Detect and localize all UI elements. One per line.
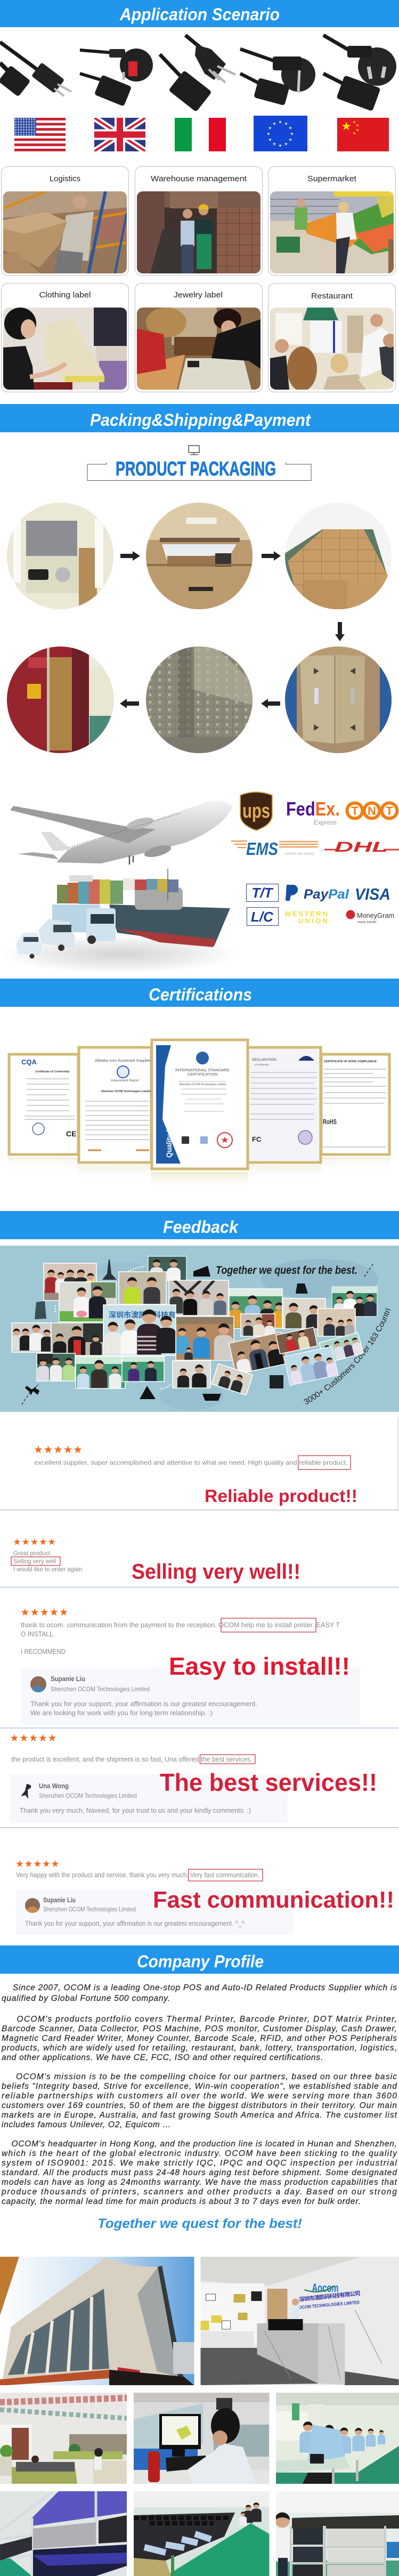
paragraph: intro: Since 2007, OCOM is a leading One-stop POS and Auto-ID Related Products Supplier which is: [13, 1983, 397, 1992]
photo: shipping container loading: [7, 647, 114, 753]
panel: Jewelry label: [135, 284, 262, 392]
photo: open office: [0, 2393, 127, 2484]
section header: Feedback: Feedback: [163, 1217, 239, 1237]
certificate: RoHS compliance: CERTIFICATE OF ROHS COMPLIANCE: [324, 1060, 377, 1063]
shipping carrier logos: [231, 792, 399, 859]
logo: VISA: VISA: [355, 885, 390, 903]
photo: restaurant diners: [270, 308, 397, 391]
paragraph: headquarters and quality: standard. All the products must pass 24-48 hours aging test before shipment. Some designated: [2, 2168, 397, 2177]
logo: EMS: EMS: [246, 839, 278, 859]
photo: stacked cartons: [285, 503, 392, 609]
paragraph: mission: includes famous Unilever, O2, Equicom ...: [2, 2120, 170, 2129]
panel: Restaurant: [268, 284, 397, 392]
certificates row: [8, 1040, 390, 1191]
paragraph: products: Magnetic Card Reader Writer, Money Counter, Barcode Scale, RFID, and other POS Peripherals: [2, 2034, 397, 2043]
photo: company lobby and reception: OCOM TECHNOLOGIES LIMITED: [299, 2299, 360, 2310]
review 1: reliable product: [0, 1418, 399, 1511]
reply name: Supanie Liu: [51, 1675, 85, 1683]
panel: Supermarket: [268, 166, 395, 275]
reply company: Shenzhen OCOM Technologies Limited: [51, 1685, 150, 1693]
photo: warehouse worker with box: [3, 191, 127, 273]
paragraph: mission: reliable partnerships with customers all over the world. We were serving more than 3600: [2, 2092, 397, 2101]
reply company: Shenzhen OCOM Technologies Limited: [43, 1905, 136, 1913]
certificate: International Standard Certification: Shenzhen OCOM Technologies Limited: [179, 1083, 226, 1086]
label: Logistics: Logistics: [50, 174, 80, 183]
paragraph: products: and other applications. We have CE, FCC, ISO and other required certifications.: [2, 2053, 323, 2062]
paragraph: headquarters and quality: system of ISO9001: 2015. We make strictly IQC, IPQC and OQC inspection per industrial: [2, 2159, 397, 2168]
certificate: CQA Certificate of Conformity: CQA: [21, 1058, 37, 1066]
arrow: [262, 551, 281, 561]
packaging flow diagram: [7, 503, 392, 753]
certificate: International Standard Certification: Quality Management System: [165, 1063, 173, 1158]
review 4: the best services: [0, 1734, 399, 1828]
paragraph: intro: [2, 1983, 397, 2003]
section header: Application Scenario: [0, 0, 399, 27]
icon: Eiffel tower: [102, 1259, 117, 1280]
icon: UK flag: [94, 118, 145, 151]
photo: warehouse inspection: [137, 191, 260, 273]
icon: leaning tower: [35, 1301, 46, 1319]
icon: Europe power cord: [240, 49, 315, 106]
avatar: [25, 1898, 40, 1913]
slogan: Together we quest for the best: Together we quest for the best.: [216, 1264, 357, 1277]
heading: Product Packaging: PRODUCT PACKAGING: [116, 458, 276, 480]
photo: open box with accessories: [7, 503, 113, 609]
certificate: RoHS compliance: RoHS: [323, 1118, 337, 1126]
icon: China flag: [337, 118, 389, 151]
review text: I would like to order again.: [13, 1565, 84, 1573]
section header: Packing&Shipping&Payment: Packing&Shipping&Payment: [90, 410, 311, 430]
payment method logos: [246, 884, 394, 925]
photo: engineer at computer: [134, 2393, 270, 2484]
photo: company lobby and reception: Aocom: [312, 2281, 339, 2295]
certificate: CQA Certificate of Conformity: CE: [66, 1129, 76, 1138]
icon: runner: [193, 1266, 210, 1277]
review 5: fast communication: [16, 1860, 394, 1935]
customer photos collage: [11, 1256, 377, 1397]
arrow: down: [335, 622, 345, 641]
section header: Certifications: [0, 979, 399, 1007]
certificate: International Standard Certification: INTERNATIONAL STANDARD: [175, 1068, 230, 1072]
logo: T/T: T/T: [251, 885, 274, 901]
callout: Reliable product: Reliable product!!: [205, 1486, 357, 1506]
review text: Selling very well: [13, 1557, 56, 1565]
icon: EU flag: [254, 116, 307, 151]
reply name: Supanie Liu: [43, 1896, 76, 1904]
photo: jewelry counter: [137, 308, 260, 390]
review 2: selling very well: [0, 1538, 399, 1588]
logo: DHL: DHL: [335, 839, 388, 855]
logo: TNT: N: [368, 804, 376, 818]
photo: carton interior: [285, 647, 392, 753]
callout: The best services: The best services!!: [160, 1769, 377, 1796]
label: Supermarket: Supermarket: [307, 174, 357, 183]
logo: TNT: T: [351, 804, 359, 818]
arrow: [120, 699, 139, 708]
reply company: Shenzhen OCOM Technologies Limited: [39, 1792, 137, 1799]
panel: Warehouse management: [135, 166, 262, 275]
five stars: [13, 1538, 55, 1545]
review text: [13, 1549, 84, 1573]
photo: company lobby and reception: 深圳市澳凯码科技有限公司: [298, 2290, 361, 2303]
review text: thank to ocom. communication from the payment to the reception. OCOM help me to install printer. EASY T: [21, 1621, 340, 1629]
photo: POS monitor test line: [134, 2491, 270, 2576]
section header: Company Profile: [0, 1945, 399, 1974]
reply name: Una Wong: [39, 1782, 69, 1790]
company profile text: [1, 1983, 397, 2206]
paragraph: products: OCOM's products portfolio covers Thermal Printer, Barcode Printer, DOT Matrix Printer,: [17, 2015, 397, 2024]
supplier reply panel: [21, 1667, 360, 1724]
icon: US power cord: [0, 42, 71, 97]
paragraph: headquarters and quality: models can have as long as 24months warranty. We have the mass production capabilities that: [2, 2178, 397, 2187]
paragraph: headquarters and quality: which is the heart of the global electronic industry. OCOM have been sticking to the quality: [2, 2149, 397, 2158]
certificate: International Standard Certification: [152, 1040, 248, 1169]
highlight box: [189, 1869, 263, 1881]
icon: Italy power cord: [160, 35, 235, 112]
paragraph: headquarters and quality: OCOM's headquarter in Hong Kong, and the production line is located in Hunan and Shenzhen,: [12, 2139, 397, 2149]
certificate: Declaration of Conformity: DECLARATION: [252, 1058, 276, 1062]
logo: DHL: [324, 839, 399, 855]
certificate: CQA Certificate of Conformity: Certificate of Conformity: [35, 1070, 70, 1073]
paragraph: products: Barcode Scanner, Data Collector, POS Machine, POS monitor, Customer Display, Cash Drawer,: [2, 2024, 397, 2033]
panel: Clothing label: [1, 284, 129, 392]
highlight box: [200, 1755, 255, 1764]
logo: PayPal: PayPal: [304, 887, 349, 902]
logo: Western Union: UNION: [298, 917, 328, 925]
logo: UPS: [240, 792, 272, 830]
certificate reflections: [8, 1158, 390, 1191]
paragraph: headquarters and quality: [1, 2139, 397, 2206]
icon: UK power cord: [80, 49, 153, 107]
highlight box: [221, 1618, 316, 1632]
certificate: Alibaba assessed supplier: Shenzhen OCOM Technologies Limited: [101, 1090, 151, 1093]
illustration: container ship and trucks: [0, 869, 240, 973]
logo: FedEx Express: Express: [314, 819, 337, 826]
review text: I RECOMMEND: [21, 1648, 66, 1656]
review text: Very happy with the product and service, thank you very much. Very fast communication.: [16, 1871, 259, 1879]
callout: Fast communication: Fast communication!!: [153, 1887, 394, 1913]
logo: UPS: ups: [242, 800, 270, 822]
paragraph: intro: qualified by Global Fortune 500 company.: [2, 1994, 170, 2003]
certificate: Alibaba assessed supplier: Assessment Report: [111, 1079, 139, 1083]
icon: Italy flag: [175, 118, 226, 151]
review text: O INSTALL.: [21, 1630, 55, 1638]
five stars: [21, 1608, 68, 1616]
icon: US flag: [14, 118, 66, 151]
flags row: [14, 116, 389, 151]
logo: TNT: [347, 803, 397, 819]
paragraph: mission: OCOM's mission is to be the compelling choice for our partners, based on our three basic: [16, 2072, 397, 2081]
review 3: easy to install: [0, 1608, 399, 1729]
logo: EMS: [231, 839, 318, 859]
section header: Certifications: Certifications: [149, 985, 252, 1004]
certificate: Declaration of Conformity: [248, 1047, 321, 1162]
reply text: Thank you very much, Naveed, for your trust to us and your kindly comments. :): [20, 1806, 251, 1814]
logo: L/C: L/C: [251, 909, 274, 925]
photo: testing racks with purple light: [0, 2491, 127, 2576]
review text: the product is excellent, and the shipment is so fast, Una offered the best services.: [12, 1755, 253, 1763]
section header: Packing&Shipping&Payment: [0, 404, 399, 432]
paragraph: products: [1, 2015, 397, 2062]
section header: Company Profile: Company Profile: [137, 1952, 264, 1971]
panel: Logistics: [1, 166, 129, 275]
logo: PayPal: [286, 885, 349, 902]
logo: MoneyGram: [346, 910, 394, 924]
supplier reply panel: [16, 1889, 293, 1935]
illustration: cargo plane: [10, 801, 233, 865]
callout: Easy to install: Easy to install!!: [169, 1652, 350, 1680]
icon: Statue of Liberty: [296, 1283, 308, 1294]
certificate: RoHS compliance: [321, 1054, 389, 1154]
reply text: We are looking for work with you for long term relationship. :): [30, 1709, 213, 1717]
certificate: CQA Certificate of Conformity: [9, 1054, 78, 1154]
arrow: [120, 551, 140, 561]
avatar: [30, 1676, 46, 1692]
avatar: [21, 1784, 31, 1799]
section header: Application Scenario: Application Scenario: [119, 5, 280, 24]
logo: FedEx Express: FedEx.: [286, 798, 340, 820]
review text: excellent supplier, super accomplished and attentive to what we need. High quality and reliable product.: [34, 1459, 347, 1466]
five stars: [34, 1446, 82, 1453]
curved caption: 3000+ customers: 3000+ Customers Cover 163 Countries: [304, 1308, 391, 1404]
supplier reply panel: [10, 1774, 288, 1823]
paragraph: mission: markets are in Europe, Australia, and fast growing South America and Africa. The customer list: [2, 2111, 397, 2120]
photo: company lobby and reception: [200, 2257, 399, 2385]
icon: China power cord: [323, 35, 396, 111]
panel: customer photo map: [0, 1246, 399, 1412]
highlight box: [298, 1456, 351, 1469]
photo: printer storage racks: [276, 2491, 399, 2576]
slogan: Together we quest for the best: Together we quest for the best!: [97, 2216, 302, 2231]
label: Warehouse management: Warehouse management: [151, 174, 247, 183]
logo: TNT: T: [386, 804, 393, 818]
certificate: Alibaba assessed supplier: Alibaba.com Assessed Supplier: [95, 1058, 151, 1063]
five stars: [16, 1860, 59, 1867]
paragraph: headquarters and quality: capacity, the normal lead time for main products is about 3 to 7 days even for bulk order.: [2, 2197, 361, 2206]
certificate: Declaration of Conformity: FC: [252, 1135, 262, 1143]
label: Clothing label: Clothing label: [39, 290, 91, 300]
photo: carton with foam: [146, 503, 253, 609]
five stars: [11, 1734, 56, 1741]
icon: plane: [25, 1383, 40, 1395]
icon: pyramid: [140, 1386, 156, 1399]
paragraph: mission: customers over 169 countries, 50 of them are the biggest distributors in their territory. Our main: [2, 2101, 397, 2110]
label: Jewelry label: Jewelry label: [174, 290, 223, 300]
photo: warehouse pallet stack: [146, 647, 254, 753]
logo: T/T: [246, 884, 278, 902]
logo: L/C: [247, 907, 278, 925]
heading: Product Packaging: [87, 446, 311, 481]
logo: MoneyGram: MoneyGram: [357, 911, 394, 919]
photo: clothing shoppers: [3, 308, 127, 390]
certificate: Alibaba assessed supplier: [79, 1047, 151, 1162]
customer photos collage: 深圳市澳凯码科技有限: [109, 1311, 183, 1319]
highlight box: [11, 1557, 60, 1565]
paragraph: mission: beliefs "Integrity based, Strive for excellence, Win-win cooperation", we established stable and: [2, 2082, 397, 2091]
photo: supermarket produce aisle: [270, 191, 394, 273]
label: Restaurant: Restaurant: [311, 292, 353, 301]
reply text: Thank you for your support, your affirmation is our greatest encouragement.: [30, 1700, 257, 1708]
arrow: [261, 699, 280, 708]
callout: Selling very well: Selling very well!!: [132, 1560, 300, 1584]
paragraph: headquarters and quality: produce thousands of printers, scanners and other products a day. Based on our strong: [1, 2187, 397, 2197]
icon: monitor: [189, 446, 199, 455]
certificate: International Standard Certification: CERTIFICATION: [188, 1072, 217, 1077]
reply text: Thank you for your support, your affirmation is our greatest encouragement. ^_^: [25, 1919, 245, 1927]
paragraph: products: products, which are widely used for retailing, restaurant, bank, lottery, transportation, logistics,: [1, 2044, 397, 2053]
review text: [21, 1621, 340, 1656]
logo: EMS: EXPRESS MAIL SERVICE: [285, 853, 314, 856]
icon: cargo ship: [202, 1394, 221, 1401]
certificate: Declaration of Conformity: of Conformity: [255, 1063, 270, 1066]
photo: company building: [0, 2257, 194, 2385]
logo: Western Union: [284, 910, 328, 925]
power cords row: [0, 35, 396, 112]
review text: Great product: [13, 1549, 51, 1557]
section header: Feedback: [0, 1211, 399, 1239]
logo: Western Union: WESTERN: [284, 910, 328, 918]
paragraph: mission: [2, 2072, 397, 2129]
icon: castle: [270, 1375, 283, 1388]
reply text: [30, 1700, 257, 1717]
logo: MoneyGram: money transfer: [357, 919, 377, 924]
photo: assembly line workers: [276, 2393, 399, 2484]
